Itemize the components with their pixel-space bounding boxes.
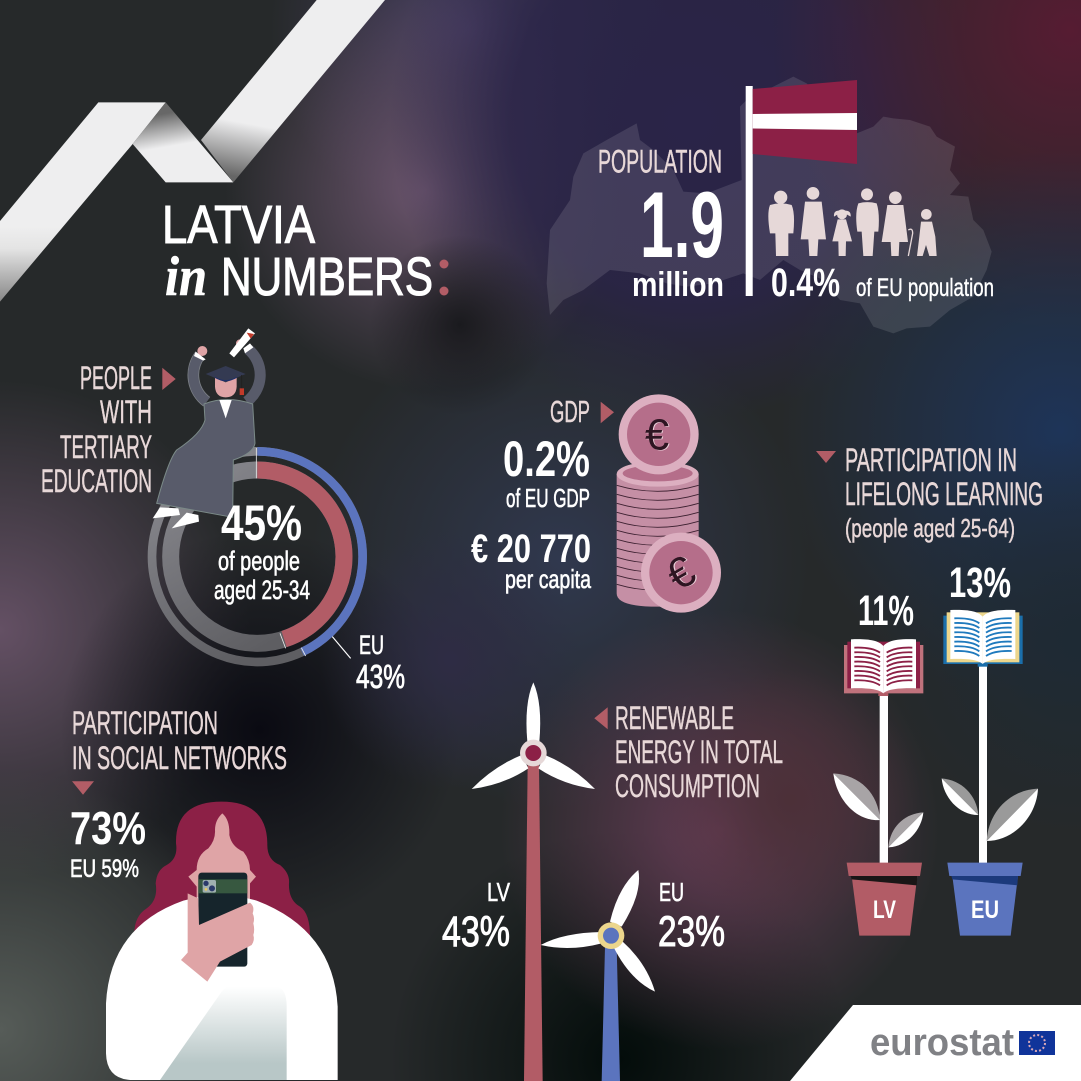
value: EU 59%: EU 59% (70, 855, 139, 883)
value: LV 43%: 43% (442, 908, 510, 956)
value: 45% of people aged 25-34: of people (218, 546, 300, 576)
icon: wind turbine LV (472, 682, 595, 1081)
heading: GDP: GDP (550, 394, 590, 429)
heading: participation in social networks (72, 705, 287, 776)
flag of Latvia (746, 80, 857, 296)
heading: participation in social networks: PARTICIPATION (72, 705, 218, 741)
donut chart: 45% vs EU 43% (152, 448, 363, 662)
arrow (72, 781, 94, 795)
value: LV 43% (442, 877, 511, 956)
icon: stack of euro coins: € (659, 547, 704, 601)
icon: wind turbine EU (541, 870, 655, 1081)
value: 20 770 euro per capita: € 20 770 (471, 527, 591, 571)
icon: woman holding phone (106, 802, 338, 1080)
eurostat logo: eurostat (870, 1022, 1014, 1064)
eurostat logo (790, 1005, 1081, 1081)
panel: tertiary education (41, 328, 405, 695)
value: 0.2% of EU GDP (503, 431, 590, 513)
icon: stack of euro coins: € (646, 412, 670, 460)
value: 45% of people aged 25-34: 45% (221, 495, 302, 551)
title: LATVIA (162, 195, 315, 255)
heading: renewable energy in total consumption: CONSUMPTION (615, 768, 760, 804)
value: EU 23%: EU (659, 877, 684, 907)
plant EU: book, stem, leaves and pot (942, 610, 1038, 936)
value: EU 23% (658, 877, 725, 956)
value: LV 43%: LV (487, 877, 511, 907)
arrow (162, 368, 176, 390)
arrow (816, 451, 836, 463)
arrow (601, 402, 614, 423)
heading: participation in social networks: IN SOCIAL NETWORKS (72, 740, 287, 776)
value: 0.2% of EU GDP: 0.2% (503, 431, 590, 487)
heading: people with tertiary education: WITH (100, 394, 152, 430)
heading: renewable energy in total consumption: ENERGY IN TOTAL (615, 734, 783, 770)
heading: renewable energy in total consumption: RENEWABLE (615, 700, 734, 736)
value: 0.4% of EU population (771, 261, 994, 305)
panel: lifelong learning (816, 442, 1043, 936)
arrow (594, 707, 608, 729)
value: EU 13%: 13% (949, 559, 1011, 607)
value: 45% of people aged 25-34 (214, 495, 310, 605)
label: EU: EU (971, 896, 999, 924)
value: EU 43%: EU (359, 630, 384, 660)
value: EU 43%: 43% (356, 658, 405, 695)
title: NUMBERS (221, 247, 433, 307)
title (162, 195, 448, 308)
value: 0.4% of EU population: of EU population (856, 274, 994, 302)
plant LV: book, stem, leaves and pot (833, 639, 923, 936)
value: 20 770 euro per capita (471, 527, 591, 594)
heading: renewable energy in total consumption (615, 700, 783, 804)
label: LV: LV (873, 896, 896, 924)
folded white ribbon (0, 0, 385, 302)
icon: stack of euro coins: € (660, 547, 705, 601)
value: 73%: 73% (70, 802, 146, 854)
map of Latvia (547, 77, 992, 333)
heading: participation in lifelong learning (845, 442, 1043, 543)
value: 1.9 million: 1.9 (640, 172, 724, 277)
icon: stack of euro coins: € (645, 411, 669, 459)
panel: population (547, 77, 994, 333)
panel: renewable energy (442, 682, 783, 1081)
icon: family of people (768, 187, 937, 256)
panel: GDP (471, 394, 721, 613)
value: 45% of people aged 25-34: aged 25-34 (214, 575, 310, 605)
value: 20 770 euro per capita: per capita (505, 564, 591, 594)
icon: stack of euro coins (617, 394, 721, 613)
heading: participation in lifelong learning: (people aged 25-64) (845, 513, 1015, 543)
heading: people with tertiary education: PEOPLE (80, 360, 152, 396)
title: in (165, 246, 207, 308)
heading: people with tertiary education: TERTIARY (60, 429, 152, 465)
heading: people with tertiary education: EDUCATION (41, 463, 152, 499)
icon: graduate sitting on the chart (153, 328, 260, 528)
panel: social networks (70, 705, 338, 1080)
value: 0.4% of EU population: 0.4% (771, 261, 840, 305)
heading: people with tertiary education (41, 360, 152, 499)
value: EU 23%: 23% (658, 908, 725, 956)
value: 0.2% of EU GDP: of EU GDP (506, 483, 590, 513)
value: LV 11%: 11% (858, 587, 914, 635)
value: 1.9 million (632, 172, 724, 304)
value: 1.9 million: million (632, 266, 724, 304)
value: EU 43% (356, 630, 405, 695)
label: population: POPULATION (598, 144, 722, 180)
